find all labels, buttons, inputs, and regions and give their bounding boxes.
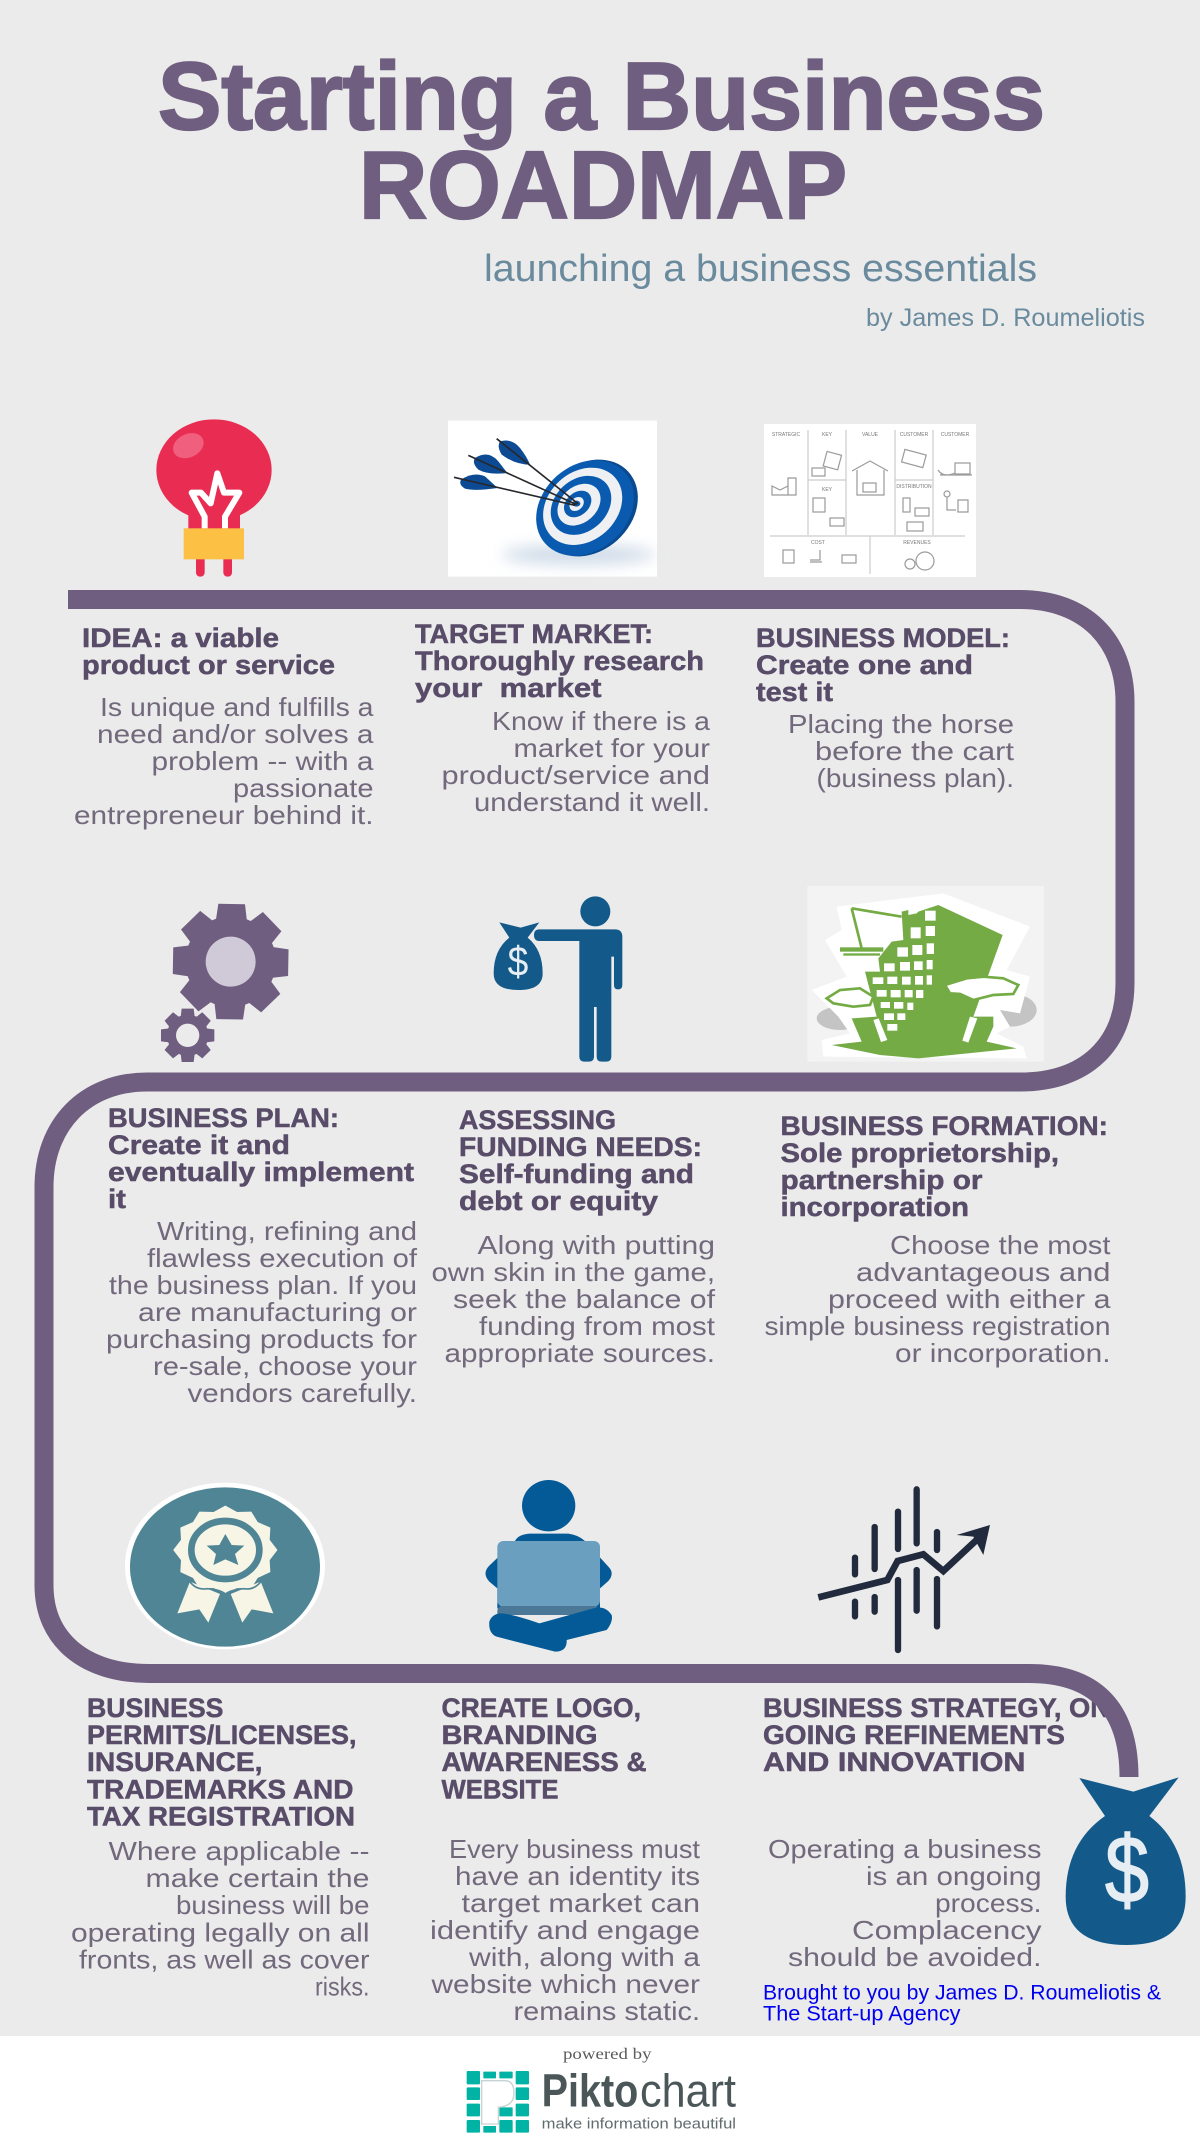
heading: idea: product or service <box>82 650 335 680</box>
body: target market: product/service and <box>442 760 710 790</box>
body: logo and branding: identify and engage <box>430 1915 700 1945</box>
body: business strategy: Complacency <box>852 1915 1042 1945</box>
icon: large money bag <box>1066 1777 1186 1945</box>
text block: business strategy <box>763 1693 1110 1972</box>
body: business plan: purchasing products for <box>106 1324 417 1354</box>
body: business formation: proceed with either a <box>828 1284 1111 1314</box>
body: assessing funding needs: funding from most <box>479 1311 716 1341</box>
icon: person holding money bag: $ <box>508 937 528 984</box>
body: business model: (business plan). <box>816 763 1014 793</box>
image: building under construction <box>807 886 1044 1062</box>
heading: target market: your market <box>415 673 602 703</box>
heading: business formation <box>780 1111 1108 1222</box>
body: business plan: Writing, refining and <box>157 1216 417 1246</box>
image: business model canvas: CUSTOMER <box>941 432 970 438</box>
body: logo and branding: target market can <box>462 1888 700 1918</box>
heading: target market: Thoroughly research <box>415 646 704 676</box>
body: assessing funding needs: own skin in the game, <box>432 1257 715 1287</box>
body: permits and licenses <box>71 1836 370 2002</box>
footer band <box>0 2036 1200 2145</box>
title <box>158 43 1045 239</box>
body: logo and branding: remains static. <box>514 1996 700 2026</box>
heading: business strategy <box>763 1693 1110 1777</box>
body: target market: Know if there is a <box>492 706 711 736</box>
heading: assessing funding needs <box>459 1105 702 1216</box>
heading: permits and licenses: BUSINESS <box>87 1693 224 1723</box>
body: assessing funding needs: seek the balance of <box>453 1284 716 1314</box>
heading: logo and branding <box>442 1693 646 1804</box>
heading: business strategy: GOING REFINEMENTS <box>763 1720 1065 1750</box>
image: business model canvas <box>764 424 976 577</box>
subtitle: launching a business essentials <box>484 248 1037 290</box>
title: ROADMAP <box>359 132 847 239</box>
body: business strategy: is an ongoing <box>866 1861 1042 1891</box>
powered by label: powered by <box>563 2046 652 2063</box>
text block: business formation <box>764 1111 1111 1368</box>
heading: assessing funding needs: debt or equity <box>459 1186 658 1216</box>
heading: business plan: Create it and <box>108 1130 290 1160</box>
credit link <box>763 1982 1161 2026</box>
body: permits and licenses: operating legally on all <box>71 1918 370 1948</box>
body: business plan: vendors carefully. <box>188 1378 417 1408</box>
body: business formation: or incorporation. <box>895 1338 1110 1368</box>
heading: business model: Create one and <box>756 650 973 680</box>
body: business plan: flawless execution of <box>147 1243 418 1273</box>
icon: person holding money bag <box>494 896 622 1062</box>
body: assessing funding needs: Along with putting <box>478 1230 715 1260</box>
heading: permits and licenses <box>87 1693 356 1832</box>
body: target market: market for your <box>514 733 710 763</box>
image: business model canvas: VALUE <box>862 432 879 438</box>
heading: business formation: incorporation <box>780 1192 969 1222</box>
body: logo and branding: Every business must <box>449 1834 701 1864</box>
heading: permits and licenses: INSURANCE, <box>87 1747 262 1777</box>
piktochart logo <box>467 2065 736 2133</box>
icon: large money bag: $ <box>1105 1817 1149 1923</box>
body: business formation: advantageous and <box>856 1257 1110 1287</box>
body: business strategy: process. <box>935 1888 1042 1918</box>
body: business model <box>788 709 1015 793</box>
piktochart logo: Pikto <box>542 2065 638 2117</box>
heading: business plan: BUSINESS PLAN: <box>108 1103 339 1133</box>
heading: business strategy: BUSINESS STRATEGY, ON <box>763 1693 1110 1723</box>
heading: business formation: partnership or <box>780 1165 983 1195</box>
body: permits and licenses: Where applicable -- <box>108 1836 370 1866</box>
body: business plan: are manufacturing or <box>138 1297 417 1327</box>
body: permits and licenses: make certain the <box>146 1863 370 1893</box>
image: business model canvas: DISTRIBUTION <box>896 484 932 490</box>
text block: logo and branding <box>430 1693 701 2026</box>
image: business model canvas: COST <box>811 540 825 546</box>
image: business model canvas: KEY <box>822 487 833 493</box>
heading: permits and licenses: TRADEMARKS AND <box>87 1774 354 1804</box>
heading: logo and branding: WEBSITE <box>442 1774 558 1804</box>
body: business plan: re-sale, choose your <box>153 1351 417 1381</box>
heading: permits and licenses: PERMITS/LICENSES, <box>87 1720 356 1750</box>
heading: target market <box>415 619 704 703</box>
body: permits and licenses: fronts, as well as cover <box>79 1944 370 1974</box>
body: business plan: the business plan. If you <box>109 1270 417 1300</box>
icon: gears <box>161 903 289 1062</box>
body: permits and licenses: business will be <box>176 1890 370 1920</box>
body: idea: passionate <box>233 773 374 803</box>
heading: business model: test it <box>756 677 833 707</box>
body: business plan <box>106 1216 418 1408</box>
text block: assessing funding needs <box>432 1105 716 1368</box>
title: Starting a Business <box>158 43 1045 150</box>
icon: growth chart arrow <box>818 1489 990 1650</box>
heading: business plan: it <box>108 1184 126 1214</box>
heading: idea: IDEA: a viable <box>82 623 279 653</box>
heading: permits and licenses: TAX REGISTRATION <box>87 1802 355 1832</box>
image: target with arrows <box>448 421 657 577</box>
byline: by James D. Roumeliotis <box>866 304 1145 332</box>
heading: logo and branding: AWARENESS & <box>442 1747 646 1777</box>
body: logo and branding: website which never <box>430 1969 700 1999</box>
credit link: Brought to you by James D. Roumeliotis & <box>763 1982 1161 2004</box>
heading: logo and branding: CREATE LOGO, <box>442 1693 641 1723</box>
body: idea: problem -- with a <box>152 746 374 776</box>
image: business model canvas: REVENUES <box>903 540 931 546</box>
heading: idea <box>82 623 335 680</box>
heading: assessing funding needs: Self-funding and <box>459 1159 694 1189</box>
heading: target market: TARGET MARKET: <box>415 619 653 649</box>
body: logo and branding: have an identity its <box>455 1861 700 1891</box>
road path <box>44 600 1129 1777</box>
heading: business formation: BUSINESS FORMATION: <box>780 1111 1108 1141</box>
heading: business plan: eventually implement <box>108 1157 414 1187</box>
icon: person with laptop <box>485 1480 612 1652</box>
heading: assessing funding needs: FUNDING NEEDS: <box>459 1132 702 1162</box>
body: business strategy: should be avoided. <box>788 1942 1042 1972</box>
text block: idea <box>74 623 374 830</box>
heading: business strategy: AND INNOVATION <box>763 1747 1026 1777</box>
heading: business model <box>756 623 1010 707</box>
body: idea: need and/or solves a <box>97 719 374 749</box>
body: idea: Is unique and fulfills a <box>100 692 374 722</box>
heading: logo and branding: BRANDING <box>442 1720 598 1750</box>
heading: business formation: Sole proprietorship, <box>780 1138 1059 1168</box>
body: business strategy: Operating a business <box>768 1834 1042 1864</box>
body: target market: understand it well. <box>474 787 710 817</box>
body: idea: entrepreneur behind it. <box>74 800 374 830</box>
body: business model: before the cart <box>815 736 1015 766</box>
body: business model: Placing the horse <box>788 709 1014 739</box>
heading: business plan <box>108 1103 414 1214</box>
body: business formation <box>764 1230 1111 1368</box>
body: permits and licenses: risks. <box>315 1972 370 2002</box>
text block: target market <box>415 619 711 817</box>
body: target market <box>442 706 711 817</box>
body: business formation: simple business registration <box>764 1311 1110 1341</box>
body: idea <box>74 692 374 830</box>
icon: award badge <box>125 1483 325 1649</box>
text block: business model <box>756 623 1015 793</box>
heading: business model: BUSINESS MODEL: <box>756 623 1010 653</box>
body: logo and branding <box>430 1834 701 2026</box>
body: logo and branding: with, along with a <box>468 1942 701 1972</box>
icon: light bulb <box>156 419 272 577</box>
piktochart logo: make information beautiful <box>542 2116 736 2132</box>
body: business strategy <box>768 1834 1042 1972</box>
image: business model canvas: STRATEGIC <box>772 432 801 438</box>
body: assessing funding needs: appropriate sources. <box>444 1338 715 1368</box>
text block: permits and licenses <box>71 1693 370 2002</box>
body: business formation: Choose the most <box>890 1230 1111 1260</box>
piktochart logo: chart <box>640 2065 736 2117</box>
heading: assessing funding needs: ASSESSING <box>459 1105 616 1135</box>
credit link: The Start-up Agency <box>763 2002 961 2026</box>
text block: business plan <box>106 1103 418 1408</box>
image: business model canvas: CUSTOMER <box>900 432 929 438</box>
body: assessing funding needs <box>432 1230 716 1368</box>
image: business model canvas: KEY <box>822 432 833 438</box>
